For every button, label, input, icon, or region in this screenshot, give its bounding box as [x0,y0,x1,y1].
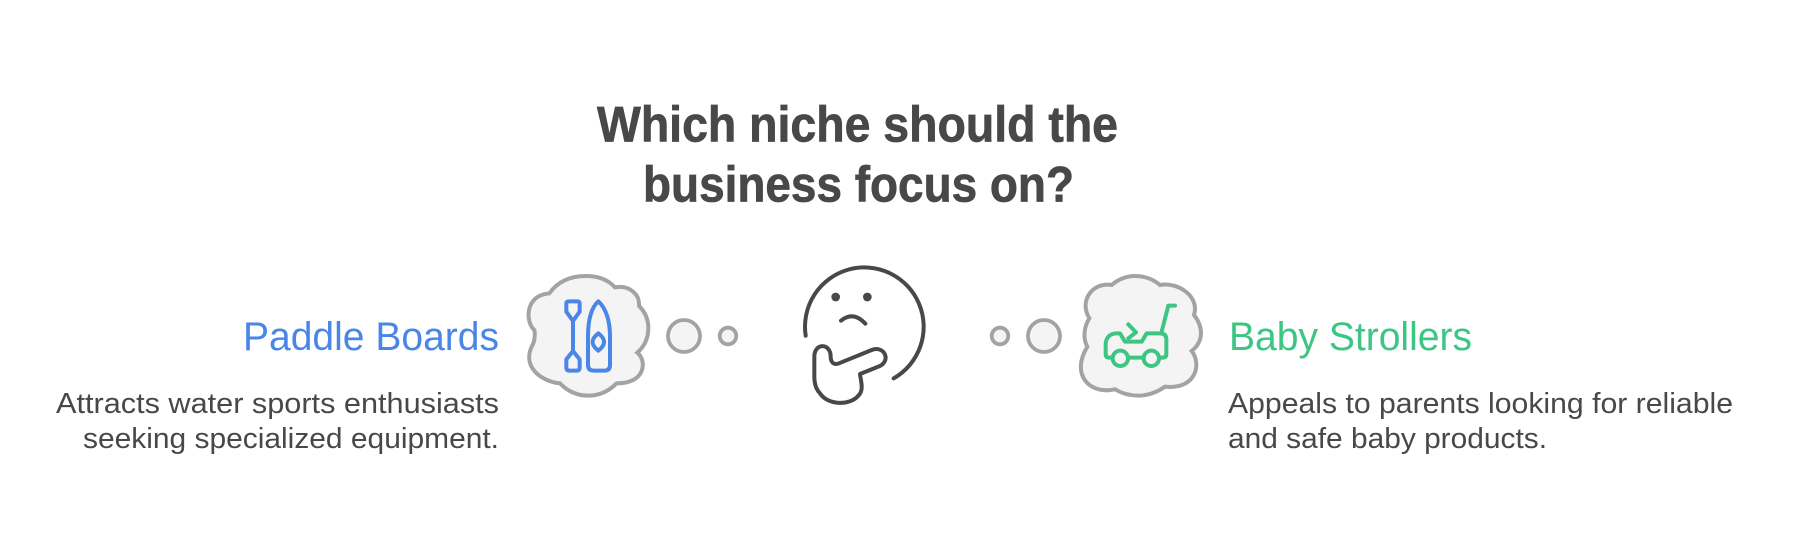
title: business focus on? [643,156,1074,212]
description: paddle boards [56,388,499,455]
face outline [805,267,924,378]
description: baby strollers: and safe baby products. [1228,423,1547,455]
icon: stroller [1106,306,1175,366]
icon: paddle [566,301,580,371]
thought bubble: small left [720,328,736,344]
heading: paddle boards: Paddle Boards [243,315,499,359]
hand [814,346,886,403]
description: baby strollers [1228,388,1733,455]
thought bubble: large left [668,320,700,352]
heading: baby strollers: Baby Strollers [1229,315,1472,359]
thought bubble: small right [992,328,1008,344]
icon: thinking face [805,267,924,403]
title [597,96,1118,212]
text block: paddle boards [56,315,499,455]
eyes [831,293,872,301]
title: Which niche should the [597,96,1118,152]
thought cloud: baby strollers [1081,276,1201,396]
thought cloud: paddle boards [529,276,648,396]
text block: baby strollers [1228,315,1733,455]
thought bubble: large right [1028,320,1060,352]
description: paddle boards: Attracts water sports enthusiasts [56,388,499,420]
description: baby strollers: Appeals to parents looking for reliable [1228,388,1733,420]
mouth [841,316,865,324]
icon: paddle board [588,301,610,371]
description: paddle boards: seeking specialized equipment. [83,423,499,455]
